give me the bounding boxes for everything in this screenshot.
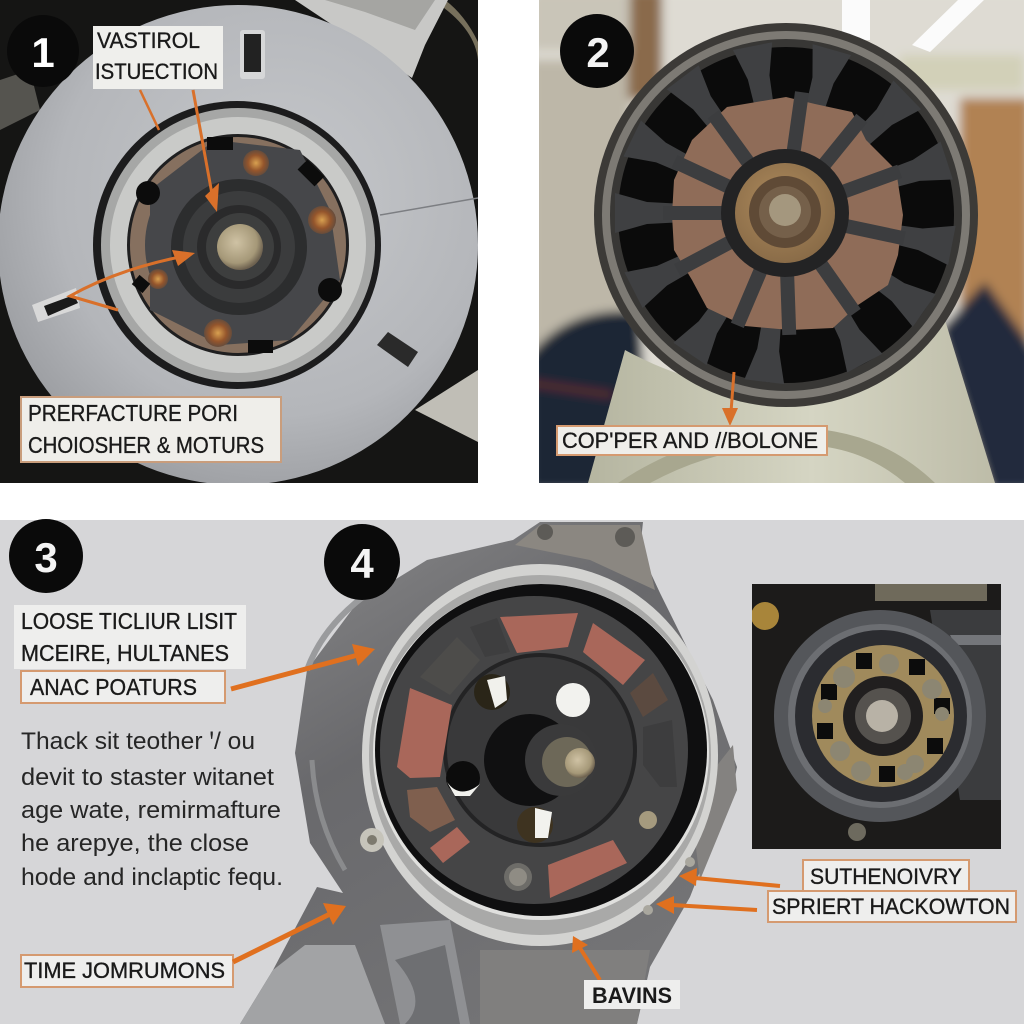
label: suthenoivry: SUTHENOIVRY bbox=[810, 864, 962, 889]
silver rim bbox=[362, 564, 718, 946]
number badge 4: 4 bbox=[350, 540, 374, 587]
panel: lower gray bbox=[0, 520, 1024, 1024]
label: vastirol istuction bbox=[93, 26, 223, 89]
label: prerfacture: CHOIOSHER & MOTURS bbox=[28, 432, 264, 458]
label: prerfacture: PRERFACTURE PORI bbox=[28, 400, 238, 426]
arrow: to lower housing bbox=[233, 903, 346, 962]
housing bbox=[240, 522, 737, 1024]
dark pads bbox=[649, 722, 666, 726]
bolts bbox=[360, 811, 695, 915]
arrows: to bolts bbox=[656, 868, 780, 914]
number badge 2: 2 bbox=[586, 29, 610, 76]
label: copper and bolone: COP'PER AND //BOLONE bbox=[562, 428, 818, 453]
blurred room background bbox=[530, 0, 1024, 490]
ring bolts bbox=[818, 654, 949, 781]
label: vastirol istuction: ISTUECTION bbox=[95, 59, 218, 84]
slots bbox=[32, 30, 418, 367]
arrow: to base bbox=[572, 936, 600, 980]
text block: description: Thack sit teother ꞌ/ ou bbox=[21, 728, 255, 755]
text block: description: devit to staster witanet bbox=[21, 764, 274, 791]
through holes bbox=[446, 674, 590, 843]
ring squares bbox=[817, 653, 950, 782]
copper windings bbox=[672, 97, 903, 330]
label: loose ticliur list: LOOSE TICLIUR LISIT bbox=[21, 608, 237, 634]
panel: photo 1 disc bbox=[0, 0, 478, 485]
window lattice bbox=[615, 42, 956, 384]
label: prerfacture bbox=[21, 397, 281, 462]
panel: photo 2 rotor bbox=[530, 0, 1024, 490]
label: bavins: BAVINS bbox=[592, 983, 672, 1008]
plate notches bbox=[132, 137, 342, 353]
number badge 1 bbox=[7, 15, 79, 87]
number badge 4 bbox=[324, 524, 400, 600]
arrows: photo 1 bbox=[70, 90, 219, 310]
arrow: to rim bbox=[231, 644, 375, 689]
rotor hub bbox=[721, 149, 849, 277]
text block: description: he arepye, the close bbox=[21, 830, 249, 857]
label: spriert hackowton: SPRIERT HACKOWTON bbox=[772, 894, 1010, 919]
text block: description: age wate, remirmafture bbox=[21, 797, 281, 824]
label: time jomrumons: TIME JOMRUMONS bbox=[24, 958, 225, 983]
label: loose ticliur list bbox=[14, 605, 246, 669]
number badge 3: 3 bbox=[34, 534, 58, 581]
arrow: photo 2 bbox=[722, 372, 738, 426]
panel: inset photo bbox=[751, 584, 1001, 849]
illustration: alternator 4 bbox=[240, 522, 737, 1024]
number badge 1: 1 bbox=[31, 29, 55, 76]
label: vastirol istuction: VASTIROL bbox=[97, 28, 200, 53]
hub and shaft bbox=[484, 714, 597, 806]
rotor rim bbox=[594, 23, 978, 407]
label: loose ticliur list: MCEIRE, HULTANES bbox=[21, 640, 229, 666]
friction pads bbox=[397, 613, 668, 898]
text block: description bbox=[21, 728, 283, 891]
number badge 3 bbox=[9, 519, 83, 593]
bronze bolts bbox=[148, 150, 336, 347]
stator plate bbox=[380, 596, 688, 904]
number badge 2 bbox=[560, 14, 634, 88]
hub gear bbox=[171, 179, 307, 315]
inner spokes bbox=[663, 91, 906, 335]
label: anac poaturs: ANAC POATURS bbox=[30, 674, 197, 700]
text block: description: hode and inclaptic fequ. bbox=[21, 864, 283, 891]
